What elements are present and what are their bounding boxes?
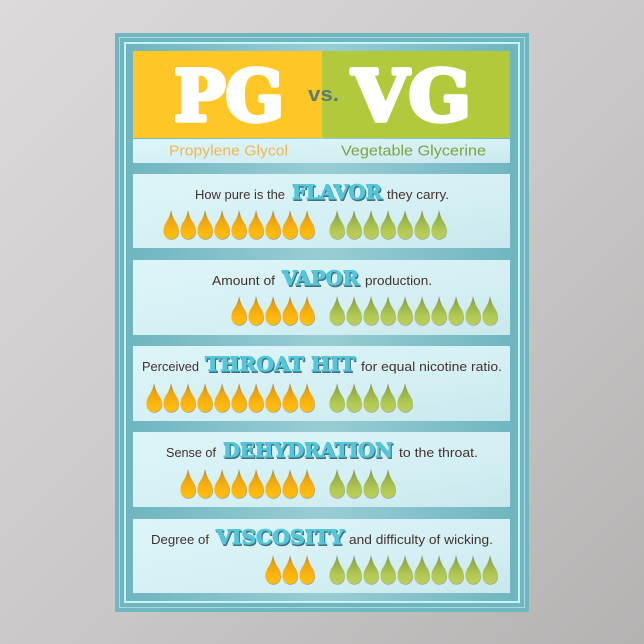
viscosity caption: and difficulty of wicking.	[349, 533, 493, 547]
VG colour block	[322, 51, 510, 138]
vapor caption: VAPOR	[282, 268, 360, 292]
flavor caption: they carry.	[387, 188, 449, 202]
panel: flavor	[133, 174, 510, 248]
dehydration caption	[166, 438, 478, 464]
vapor caption: VAPOR	[281, 266, 359, 290]
flavor caption	[195, 180, 449, 206]
Propylene Glycol: Propylene Glycol	[169, 142, 288, 160]
flavor VG drops: 7	[329, 210, 447, 240]
viscosity caption: Degree of	[151, 533, 210, 547]
viscosity caption	[151, 525, 493, 550]
throat hit caption: for equal nicotine ratio.	[361, 360, 502, 374]
PG heading: PG	[174, 54, 284, 138]
vapor caption	[212, 266, 432, 292]
dehydration caption: Sense of	[166, 446, 217, 460]
poster frame	[115, 33, 529, 612]
panel: vapor	[133, 260, 510, 335]
dehydration VG drops: 4	[329, 469, 396, 499]
dehydration caption: to the throat.	[399, 446, 478, 460]
Vegetable Glycerine: Vegetable Glycerine	[341, 142, 486, 160]
flavor caption: FLAVOR	[292, 180, 382, 204]
vapor caption: production.	[365, 274, 432, 288]
viscosity VG drops: 10	[329, 555, 498, 585]
panel: viscosity	[133, 519, 510, 593]
dehydration caption: DEHYDRATION	[224, 440, 394, 464]
panel: throat hit	[133, 346, 510, 421]
flavor caption: FLAVOR	[293, 182, 383, 206]
viscosity caption: VISCOSITY	[215, 525, 345, 549]
throat hit PG drops: 10	[146, 383, 315, 413]
dehydration caption: DEHYDRATION	[223, 438, 393, 462]
vapor VG drops: 10	[329, 296, 498, 326]
dehydration PG drops: 8	[180, 469, 315, 499]
viscosity PG drops: 3	[265, 555, 315, 585]
throat hit VG drops: 5	[329, 383, 413, 413]
flavor PG drops: 9	[163, 210, 315, 240]
PG colour block	[133, 51, 322, 138]
VG heading: VG	[351, 54, 471, 138]
panel: dehydration	[133, 432, 510, 507]
subtitle strip	[133, 139, 510, 163]
flavor caption: How pure is the	[195, 188, 285, 202]
viscosity caption: VISCOSITY	[216, 526, 346, 550]
vapor PG drops: 5	[231, 296, 315, 326]
vs. label: vs.	[308, 84, 339, 106]
throat hit caption: THROAT HIT	[205, 352, 355, 376]
vapor caption: Amount of	[212, 274, 276, 288]
throat hit caption	[142, 352, 502, 378]
throat hit caption: THROAT HIT	[206, 354, 356, 378]
header: PG vs VG	[133, 51, 510, 138]
throat hit caption: Perceived	[142, 360, 199, 374]
